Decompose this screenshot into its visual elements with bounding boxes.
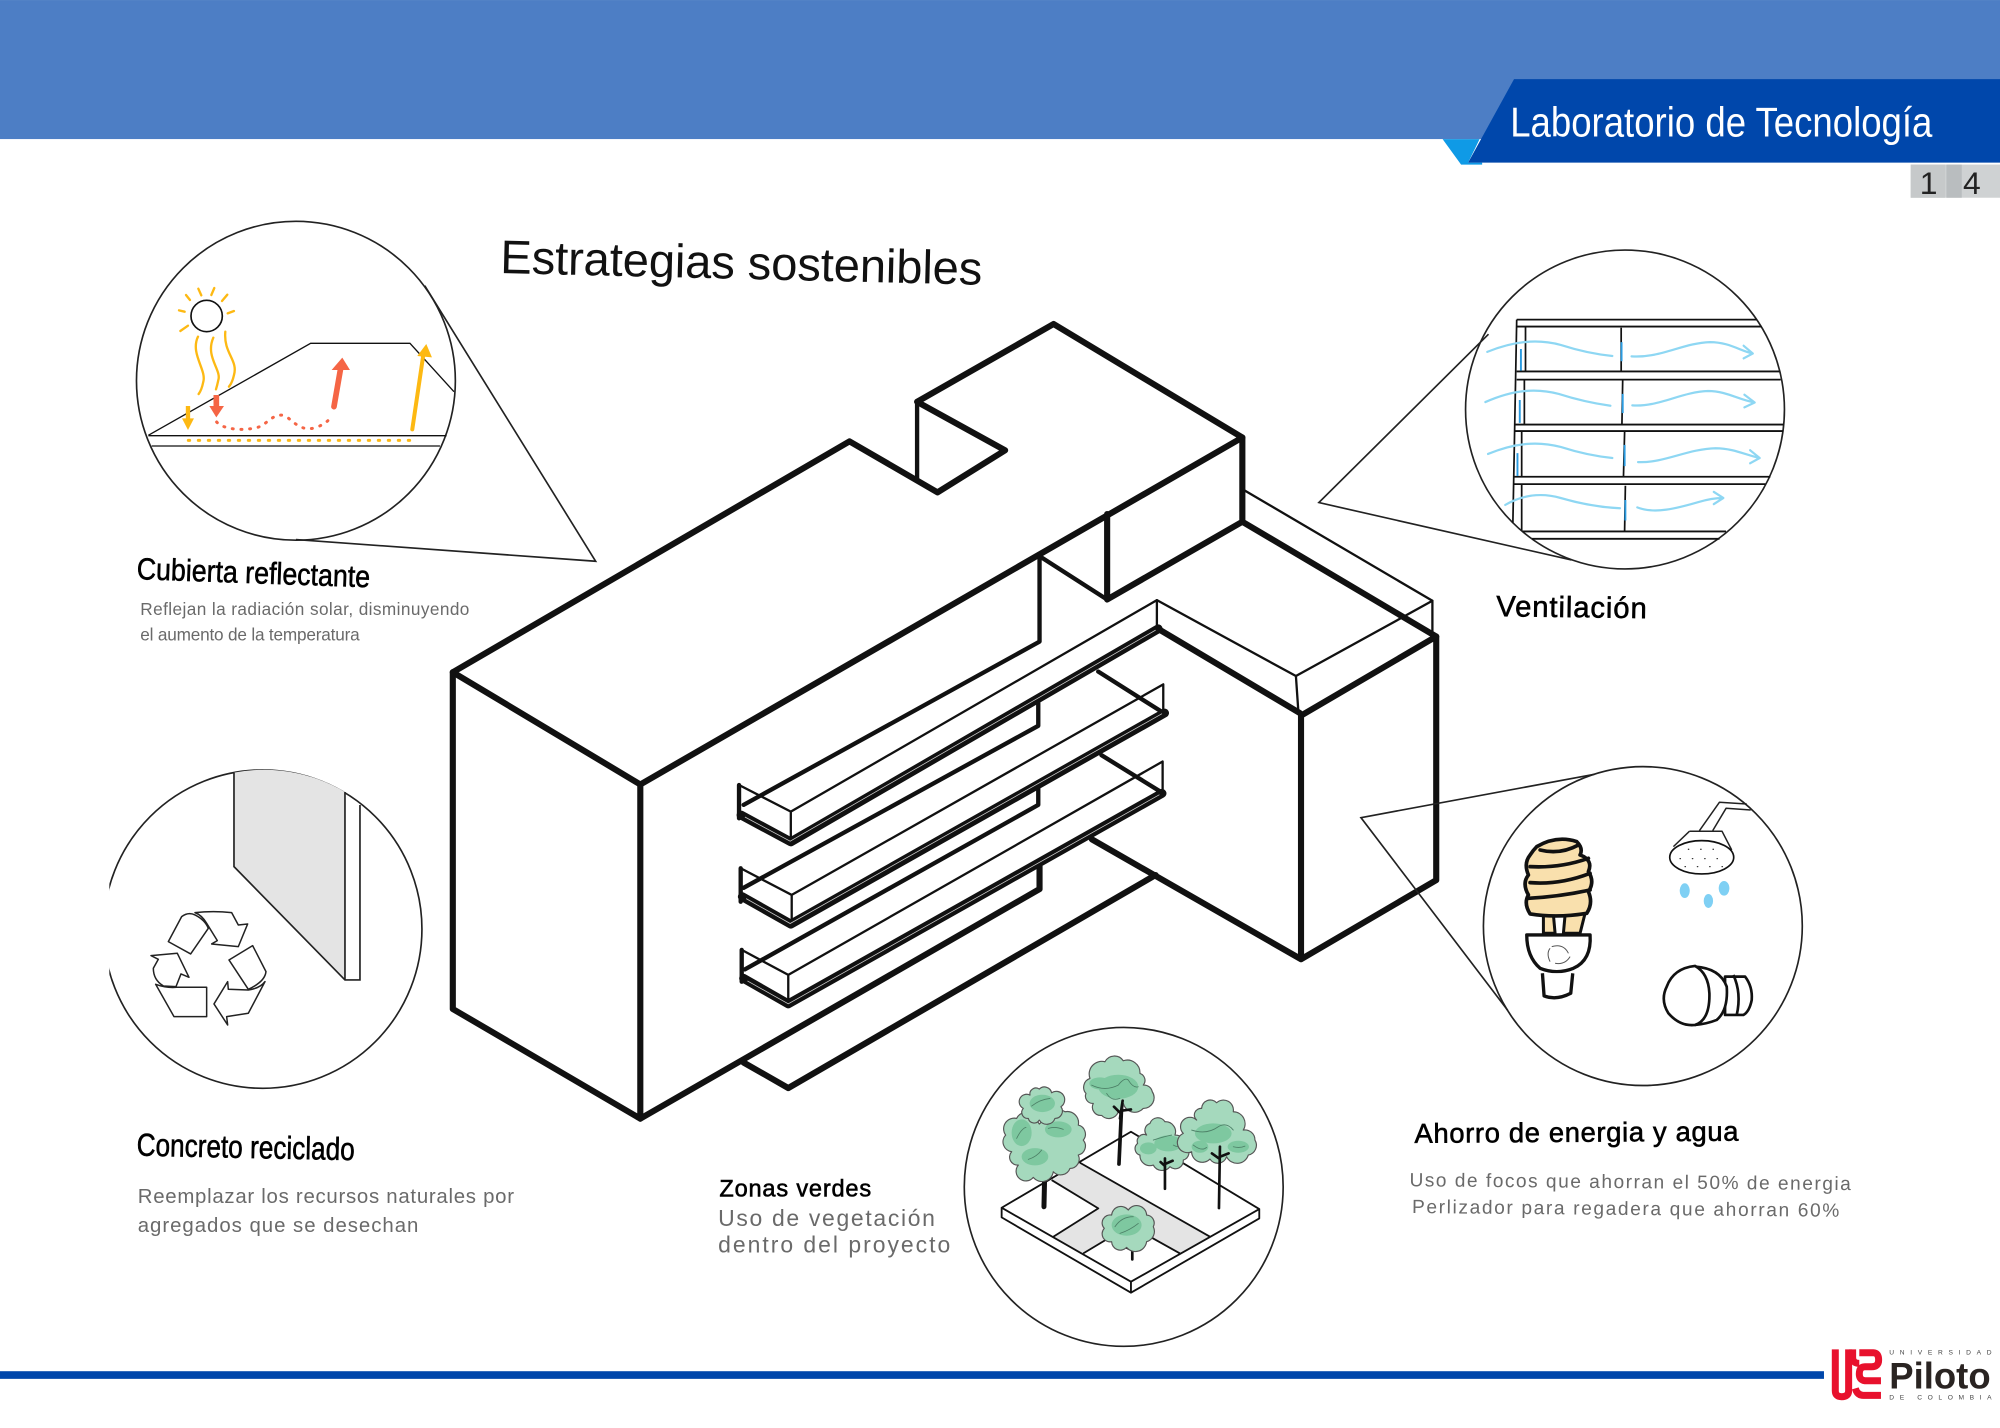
text: cubierta reflectante: el aumento de la temperatura — [140, 624, 360, 644]
balcony 1 — [739, 600, 1158, 842]
text: zonas verdes — [718, 1175, 950, 1258]
text: ventilacion: Ventilación — [1496, 590, 1647, 625]
landscape platform — [1002, 1132, 1259, 1293]
text: cubierta reflectante: Reflejan la radiación solar, disminuyendo — [140, 599, 469, 619]
heat dots — [188, 436, 412, 445]
icon: orange arrow down — [209, 395, 224, 417]
logo: universidad piloto: DE COLOMBIA — [1889, 1394, 1992, 1401]
icon: yellow arrow down — [182, 406, 194, 430]
icon: rear tree — [1084, 1056, 1154, 1164]
icon: orange dotted bounce — [217, 415, 330, 429]
text: ahorro de energia y agua: Uso de focos que ahorran el 50% de energia — [1409, 1170, 1851, 1195]
text: concreto reciclado: Reemplazar los recursos naturales por — [138, 1186, 514, 1208]
icon: sun — [179, 288, 235, 394]
icon: recycling symbol — [151, 912, 266, 1025]
isometric building — [453, 324, 1436, 1119]
text: ahorro de energia y agua: Ahorro de energia y agua — [1414, 1116, 1739, 1149]
logo: universidad piloto: UNIVERSIDAD — [1889, 1350, 1992, 1357]
icon: small tree — [1135, 1118, 1189, 1189]
icon: big tree — [1003, 1087, 1085, 1207]
balcony 3 — [742, 762, 1163, 1004]
text: zonas verdes: Zonas verdes — [719, 1175, 871, 1201]
blue window marks — [1517, 342, 1625, 520]
text: zonas verdes: dentro del proyecto — [718, 1232, 950, 1258]
panel: ahorro de energia y agua detail — [1361, 767, 1802, 1085]
header title: Laboratorio de Tecnología — [1510, 99, 1933, 146]
panel: concreto reciclado detail — [104, 770, 422, 1088]
title: Estrategias sostenibles — [500, 231, 983, 296]
icon: airflow arrows — [1485, 342, 1760, 510]
page number — [1911, 165, 2000, 201]
text: ahorro de energia y agua: Perlizador para regadera que ahorran 60% — [1412, 1197, 1839, 1222]
icon: spiral light bulb — [1525, 839, 1592, 998]
text: concreto reciclado — [136, 1127, 514, 1237]
text: concreto reciclado: Concreto reciclado — [136, 1127, 355, 1167]
icon: aerator — [1664, 966, 1752, 1025]
icon: center tree — [1102, 1206, 1154, 1259]
logo: universidad piloto — [1835, 1349, 1992, 1401]
roof and slab lines — [148, 343, 454, 446]
icon: orange arrow up — [332, 358, 350, 407]
text: cubierta reflectante — [136, 552, 469, 644]
page number: 1 — [1920, 165, 1937, 201]
panel: ventilacion detail — [1319, 250, 1784, 569]
concrete wall — [234, 770, 360, 980]
header band — [0, 0, 2000, 165]
icon: shower head — [1670, 802, 1751, 908]
text: cubierta reflectante: Cubierta reflectante — [136, 552, 371, 594]
footer bar — [0, 1371, 1824, 1379]
balcony 2 — [741, 684, 1165, 924]
text: ahorro de energia y agua — [1409, 1116, 1851, 1222]
text: concreto reciclado: agregados que se desechan — [138, 1215, 418, 1237]
facade lines — [1513, 320, 1784, 539]
icon: yellow arrow up — [412, 344, 432, 429]
logo: universidad piloto: Piloto — [1889, 1355, 1991, 1397]
panel: cubierta reflectante detail — [136, 221, 596, 561]
icon: right tree — [1177, 1100, 1256, 1208]
page number: 4 — [1963, 165, 1981, 201]
text: zonas verdes: Uso de vegetación — [718, 1205, 935, 1231]
panel: zonas verdes detail — [964, 1027, 1283, 1346]
